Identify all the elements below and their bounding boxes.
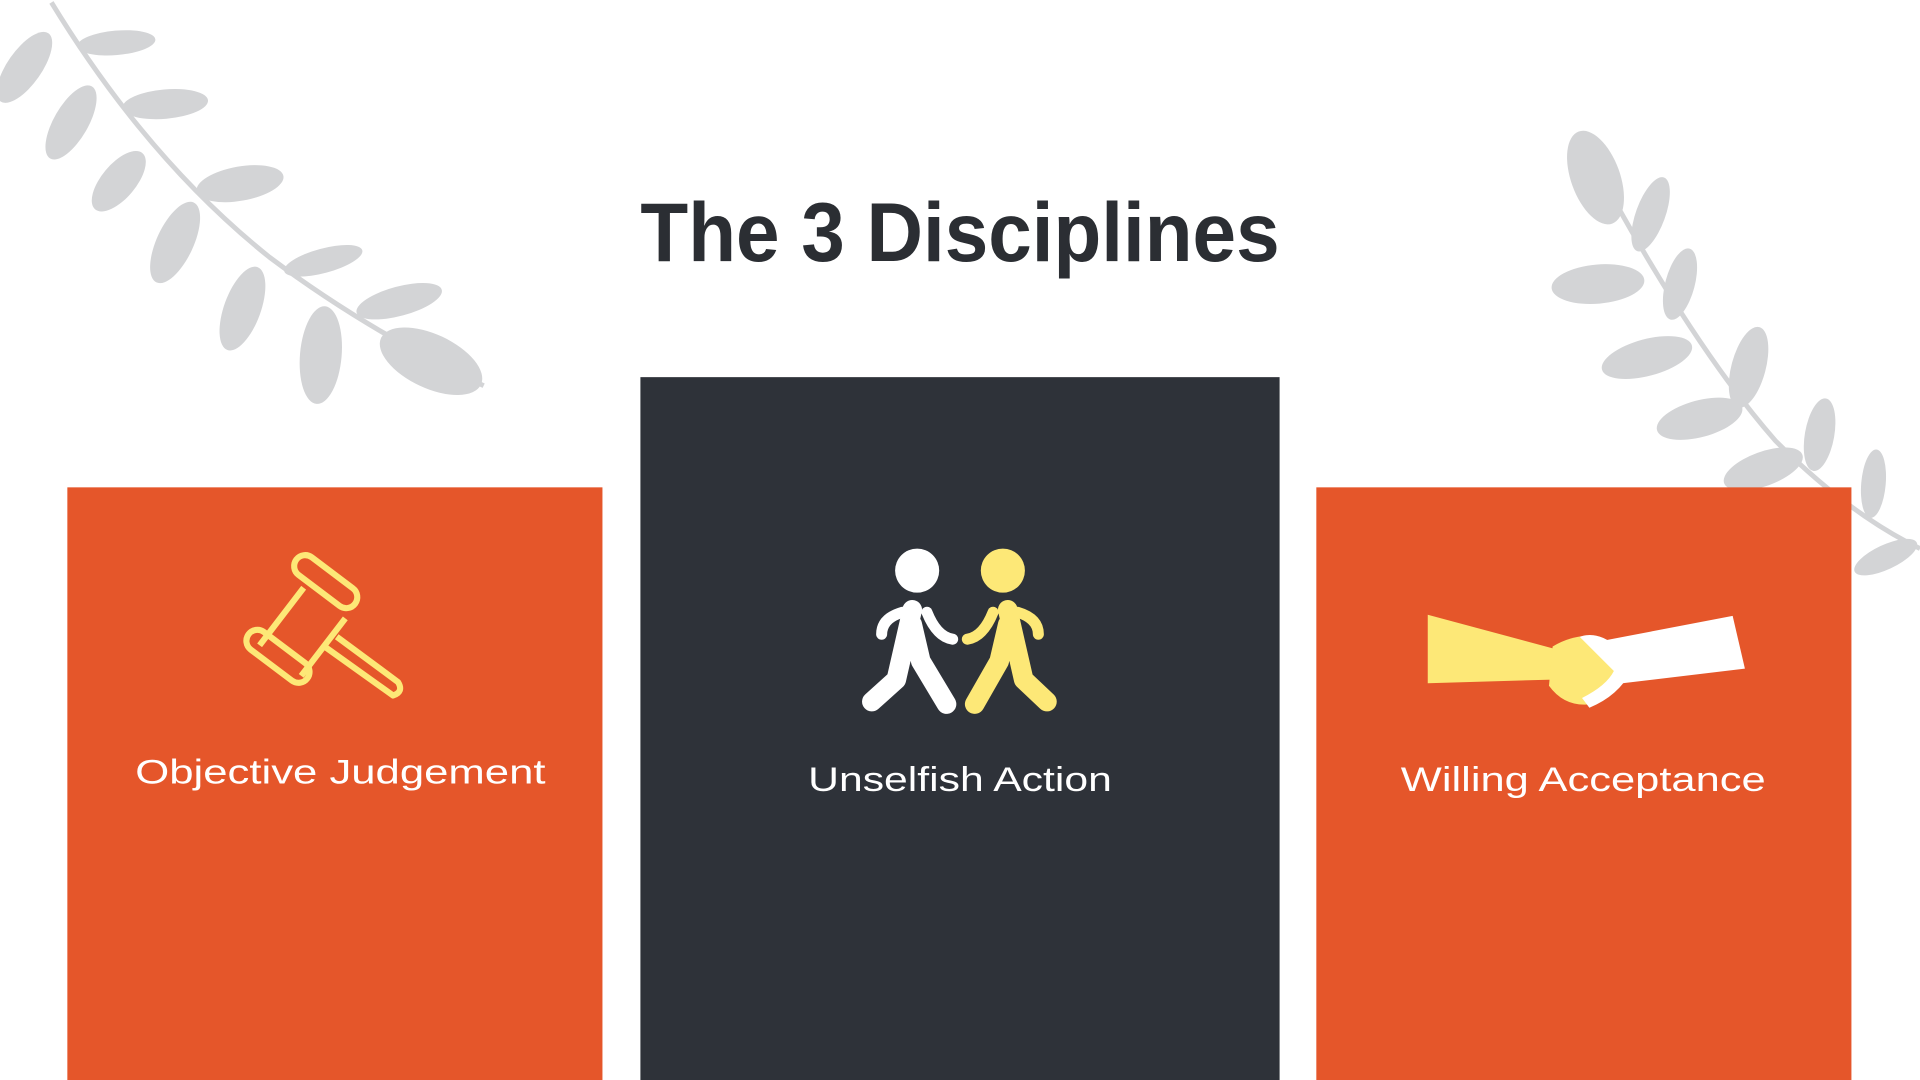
label: objective judgement: Objective Judgement bbox=[135, 754, 546, 792]
icon: walkers bbox=[872, 549, 1047, 704]
title: The 3 Disciplines bbox=[640, 186, 1280, 279]
panel: willing acceptance bbox=[1316, 487, 1851, 1080]
decoration: left leaf branch bbox=[0, 2, 492, 409]
panel: unselfish action bbox=[640, 377, 1280, 1080]
panel: objective judgement bbox=[67, 487, 602, 1080]
label: willing acceptance: Willing Acceptance bbox=[1401, 761, 1766, 799]
decoration: right leaf branch bbox=[1550, 123, 1920, 583]
icon: gavel bbox=[242, 551, 400, 696]
label: unselfish action: Unselfish Action bbox=[808, 761, 1112, 799]
icon: handshake bbox=[1428, 615, 1745, 708]
